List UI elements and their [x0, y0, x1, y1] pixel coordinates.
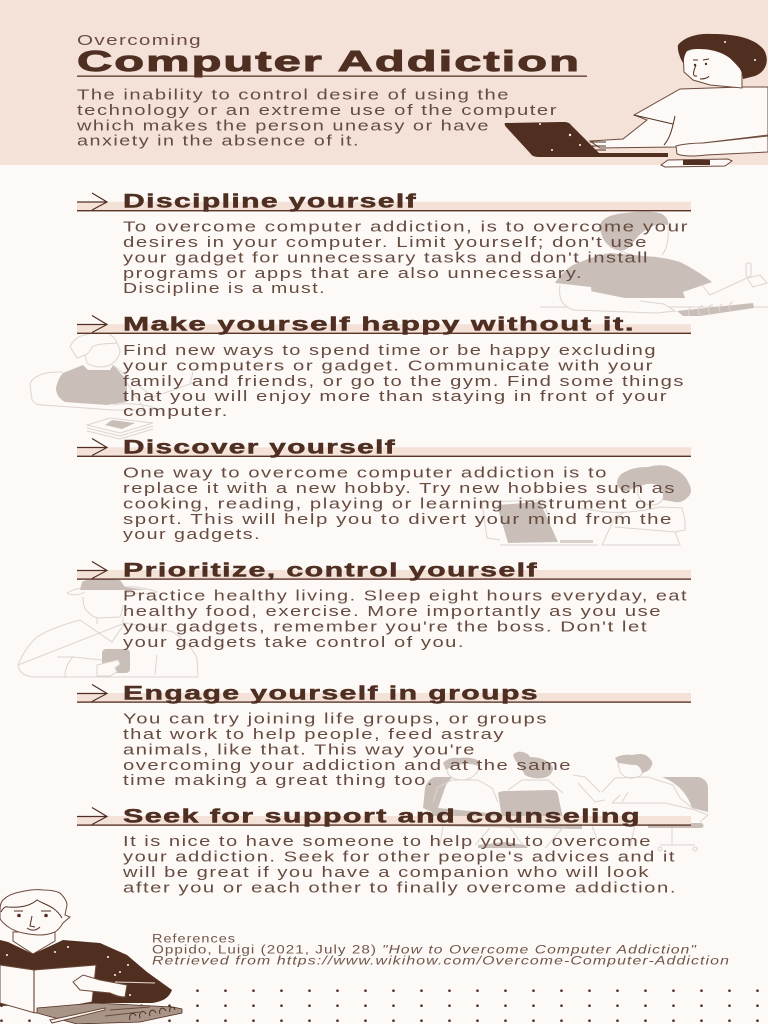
heading bar [77, 202, 691, 210]
section: Seek for support and counseling [77, 806, 691, 897]
heading: Engage yourself in groups [123, 682, 539, 704]
references: References [152, 933, 236, 945]
heading: Seek for support and counseling [123, 806, 641, 828]
body text [123, 220, 689, 297]
title rule [77, 76, 587, 77]
heading rule [77, 701, 691, 703]
section: Engage yourself in groups [77, 682, 691, 789]
body text: Discipline is a must. [123, 281, 326, 297]
body text: desires in your computer. Limit yourself; don't use [123, 235, 648, 251]
arrow [77, 316, 107, 332]
body text [123, 466, 676, 543]
kicker: Overcoming: Overcoming [77, 33, 202, 49]
arrow [77, 808, 107, 824]
arrow [77, 562, 107, 578]
body text: replace it with a new hobby. Try new hobbies such as [123, 481, 676, 497]
body text [123, 343, 685, 420]
body text [123, 589, 688, 651]
body text: family and friends, or go to the gym. Find some things [123, 374, 685, 390]
intro paragraph [76, 88, 558, 149]
section: Prioritize, control yourself [77, 559, 691, 651]
body text: your gadget for unnecessary tasks and don't install [123, 251, 649, 267]
heading: Prioritize, control yourself [123, 559, 538, 581]
heading bar [77, 447, 691, 456]
body text: computer. [123, 404, 229, 420]
references: Retrieved from https://www.wikihow.com/Overcome-Computer-Addiction [152, 956, 730, 968]
body text: animals, like that. This way you're [123, 742, 476, 758]
body text: time making a great thing too. [123, 773, 434, 789]
intro paragraph: anxiety in the absence of it. [77, 133, 360, 149]
body text [123, 712, 572, 789]
references: "How to Overcome Computer Addiction" [382, 944, 697, 956]
heading: Make yourself happy without it. [123, 314, 635, 336]
body text: after you or each other to finally overcome addiction. [123, 881, 677, 897]
illustration: ghost group meeting [423, 752, 708, 851]
body text: cooking, reading, playing or learning instrument or [123, 497, 656, 513]
body text: that work to help people, feed astray [123, 727, 505, 743]
heading: Discover yourself [123, 436, 396, 458]
intro paragraph: which makes the person uneasy or have [76, 118, 490, 134]
heading rule [77, 210, 691, 211]
arrow [77, 684, 107, 702]
heading rule [77, 824, 691, 826]
illustration: ghost person reading [30, 332, 193, 439]
illustration: ghost man writing [540, 212, 768, 316]
body text: overcoming your addiction and at the same [123, 758, 572, 774]
illustration: ghost woman with laptop [482, 465, 691, 545]
heading rule [77, 333, 691, 334]
intro paragraph: technology or an extreme use of the computer [77, 103, 558, 119]
heading rule [77, 456, 691, 457]
dotted pattern [0, 983, 768, 1024]
body text: To overcome computer addiction, is to overcome your [123, 220, 689, 236]
heading bar [77, 570, 691, 578]
heading bar [77, 816, 691, 824]
intro paragraph: The inability to control desire of using the [77, 88, 510, 104]
title: Computer Addiction: Computer Addiction [77, 46, 581, 78]
body text: healthy food, exercise. More importantly as you use [123, 604, 662, 620]
body text [122, 834, 677, 897]
body text: Practice healthy living. Sleep eight hours everyday, eat [123, 589, 688, 605]
body text: will be great if you have a companion who will look [122, 865, 650, 881]
body text: programs or apps that are also unnecessary. [123, 266, 583, 282]
body text: your gadgets take control of you. [123, 635, 465, 651]
heading: Discipline yourself [123, 191, 417, 213]
references [152, 933, 730, 968]
illustration: man at laptop [505, 34, 768, 167]
body text: You can try joining life groups, or groups [123, 712, 548, 728]
heading rule [77, 578, 691, 580]
heading bar [77, 324, 691, 333]
illustration: man reading at desk [0, 890, 182, 1024]
body text: Find new ways to spend time or be happy excluding [123, 343, 657, 359]
heading bar [77, 693, 691, 701]
illustration: ghost man with hat and phone [18, 579, 198, 677]
body text: One way to overcome computer addiction is to [123, 466, 608, 482]
arrow [77, 438, 107, 456]
body text: your gadgets. [123, 527, 261, 543]
body text: that you will enjoy more than staying in front of your [123, 389, 668, 405]
title block [77, 33, 587, 78]
header band [0, 0, 768, 165]
section: Make yourself happy without it. [77, 314, 691, 420]
body text: sport. This will help you to divert your mind from the [123, 512, 673, 528]
body text: It is nice to have someone to help you to overcome [123, 834, 652, 850]
body text: your addiction. Seek for other people's advices and it [123, 850, 676, 866]
body text: your computers or gadget. Communicate with your [123, 358, 654, 374]
body text: your gadgets, remember you're the boss. Don't let [123, 619, 648, 635]
section: Discover yourself [77, 436, 691, 543]
references: Oppido, Luigi (2021, July 28) [152, 944, 377, 956]
section: Discipline yourself [77, 191, 691, 297]
arrow [77, 193, 107, 210]
